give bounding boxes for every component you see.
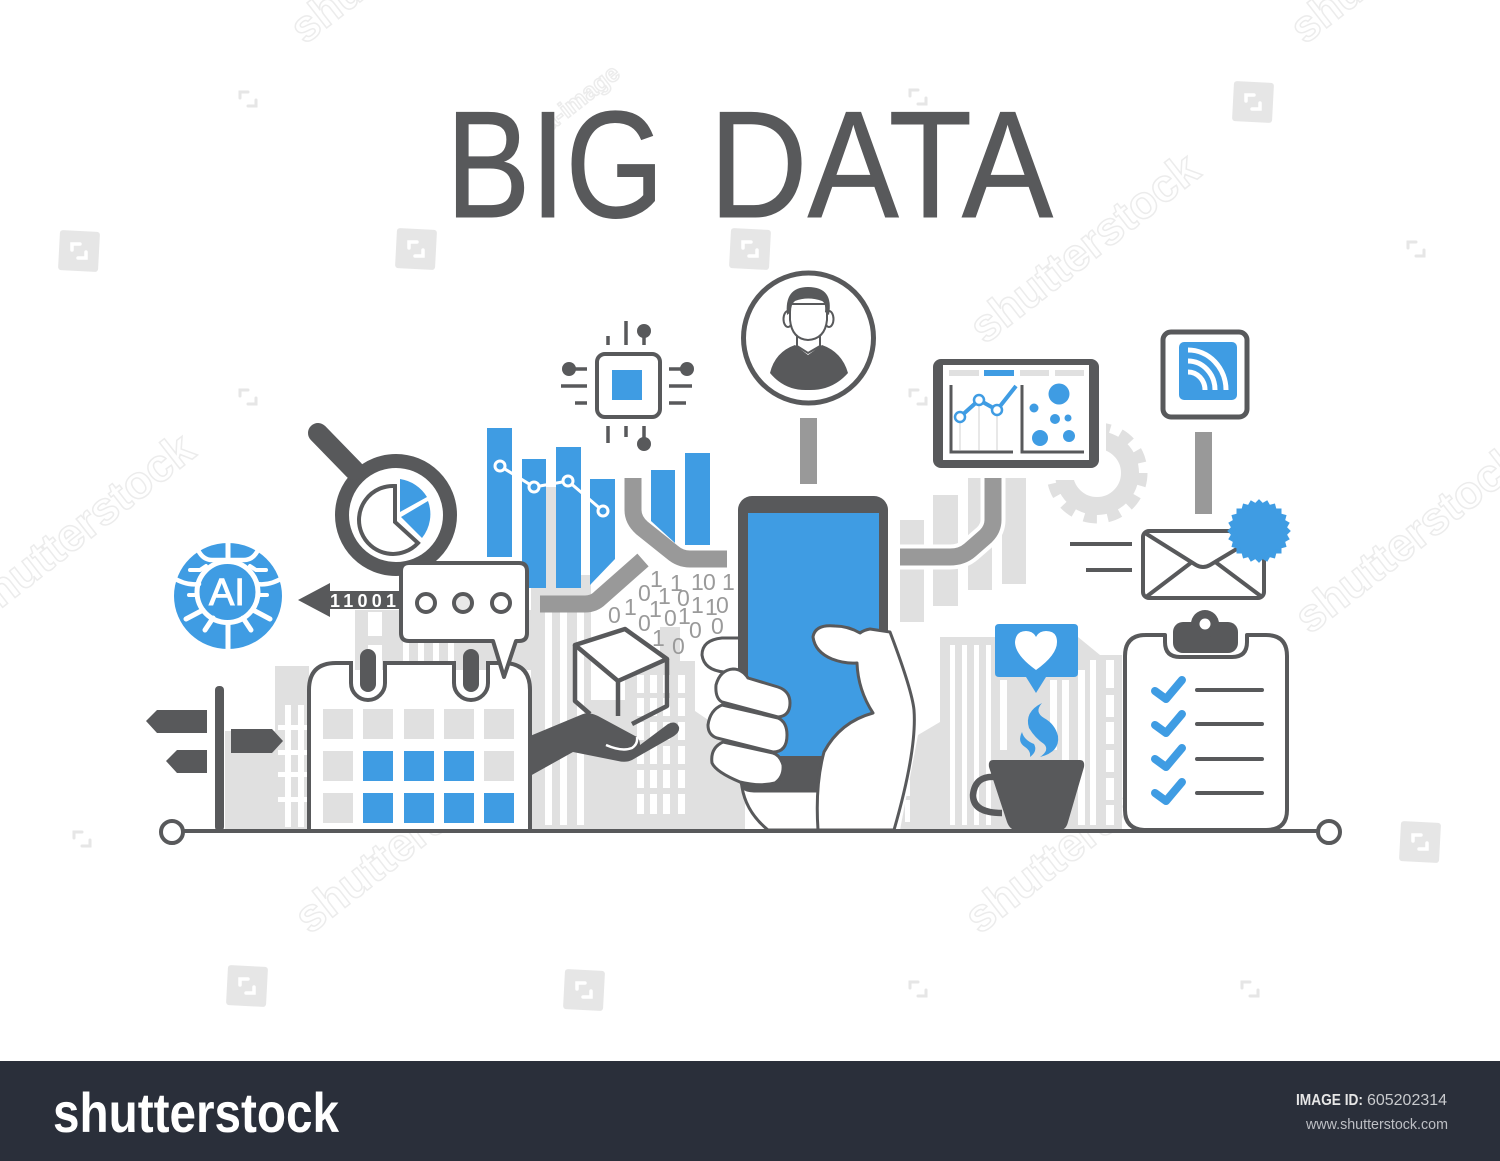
title: BIG	[446, 80, 664, 250]
binary digits: 0	[638, 580, 651, 606]
icon: AI brain	[172, 538, 284, 654]
icon: microchip	[561, 321, 694, 451]
binary digits: 0	[672, 633, 685, 659]
footer url: www.shutterstock.com	[1305, 1116, 1448, 1133]
icon: heart bubble	[995, 624, 1078, 693]
binary digits: 0	[638, 610, 651, 636]
icon: dashboard tablet	[933, 359, 1099, 468]
icon: magnifying glass with pie chart	[318, 433, 450, 569]
binary digits: 0	[716, 592, 729, 618]
icon: envelope	[1070, 499, 1291, 598]
bar chart	[487, 428, 710, 588]
binary digits: 1	[705, 594, 718, 620]
fingers	[716, 669, 790, 717]
binary digits: 1	[649, 596, 662, 622]
calendar	[309, 649, 530, 830]
binary digits: 0	[608, 602, 621, 628]
binary digits: 1	[722, 569, 735, 595]
footer logo: shutterstock	[53, 1081, 340, 1144]
binary digits: 1	[650, 566, 663, 592]
icon: user avatar	[744, 273, 874, 403]
speech bubble	[401, 563, 527, 677]
binary digits: 1	[678, 603, 691, 629]
connectors	[540, 418, 1204, 604]
icon: gear	[1040, 418, 1142, 518]
footer image id: 605202314	[1367, 1092, 1447, 1109]
icon: cube	[575, 629, 667, 724]
timeline baseline	[161, 821, 1340, 843]
thumb	[813, 626, 914, 830]
icon: notification seal	[1227, 499, 1291, 563]
binary digits: 1	[670, 570, 683, 596]
icon: open hand	[530, 713, 679, 776]
right grey bars	[900, 478, 1026, 622]
binary digits: 1	[624, 594, 637, 620]
title: DATA	[709, 80, 1054, 250]
binary digits: 1	[658, 583, 671, 609]
icon: signpost	[146, 686, 283, 831]
title	[446, 80, 1054, 250]
finger behind phone	[702, 638, 745, 672]
hand holding smartphone	[702, 496, 914, 830]
binary digits: 1	[652, 625, 665, 651]
left skyline	[225, 487, 745, 830]
phone	[738, 496, 888, 791]
binary digits: 0	[703, 569, 716, 595]
watermarks: shutterstock	[959, 142, 1209, 353]
palm	[742, 787, 818, 830]
icon: AI brain: AI	[209, 572, 245, 614]
footer bar	[0, 1061, 1500, 1161]
icon: clipboard	[1125, 610, 1287, 830]
binary digits: 0	[711, 613, 724, 639]
watermarks: shutterstock	[284, 732, 534, 943]
icon: coffee cup	[973, 703, 1084, 830]
right skyline	[900, 637, 1122, 830]
icon: wifi square	[1163, 332, 1247, 417]
arrow: 11001: 11001	[330, 591, 396, 611]
binary digits: 0	[677, 585, 690, 611]
binary digits: 0	[664, 605, 677, 631]
footer image id: IMAGE ID:	[1296, 1092, 1363, 1109]
watermarks: a-image	[537, 60, 625, 137]
watermarks: shutterstock	[954, 732, 1204, 943]
footer image id	[1296, 1092, 1447, 1109]
binary digits	[608, 566, 735, 659]
background skyline	[225, 478, 1122, 830]
binary digits: 0	[689, 617, 702, 643]
binary digits: 1	[691, 592, 704, 618]
arrow: 11001	[298, 583, 402, 617]
binary digits: 1	[691, 569, 704, 595]
